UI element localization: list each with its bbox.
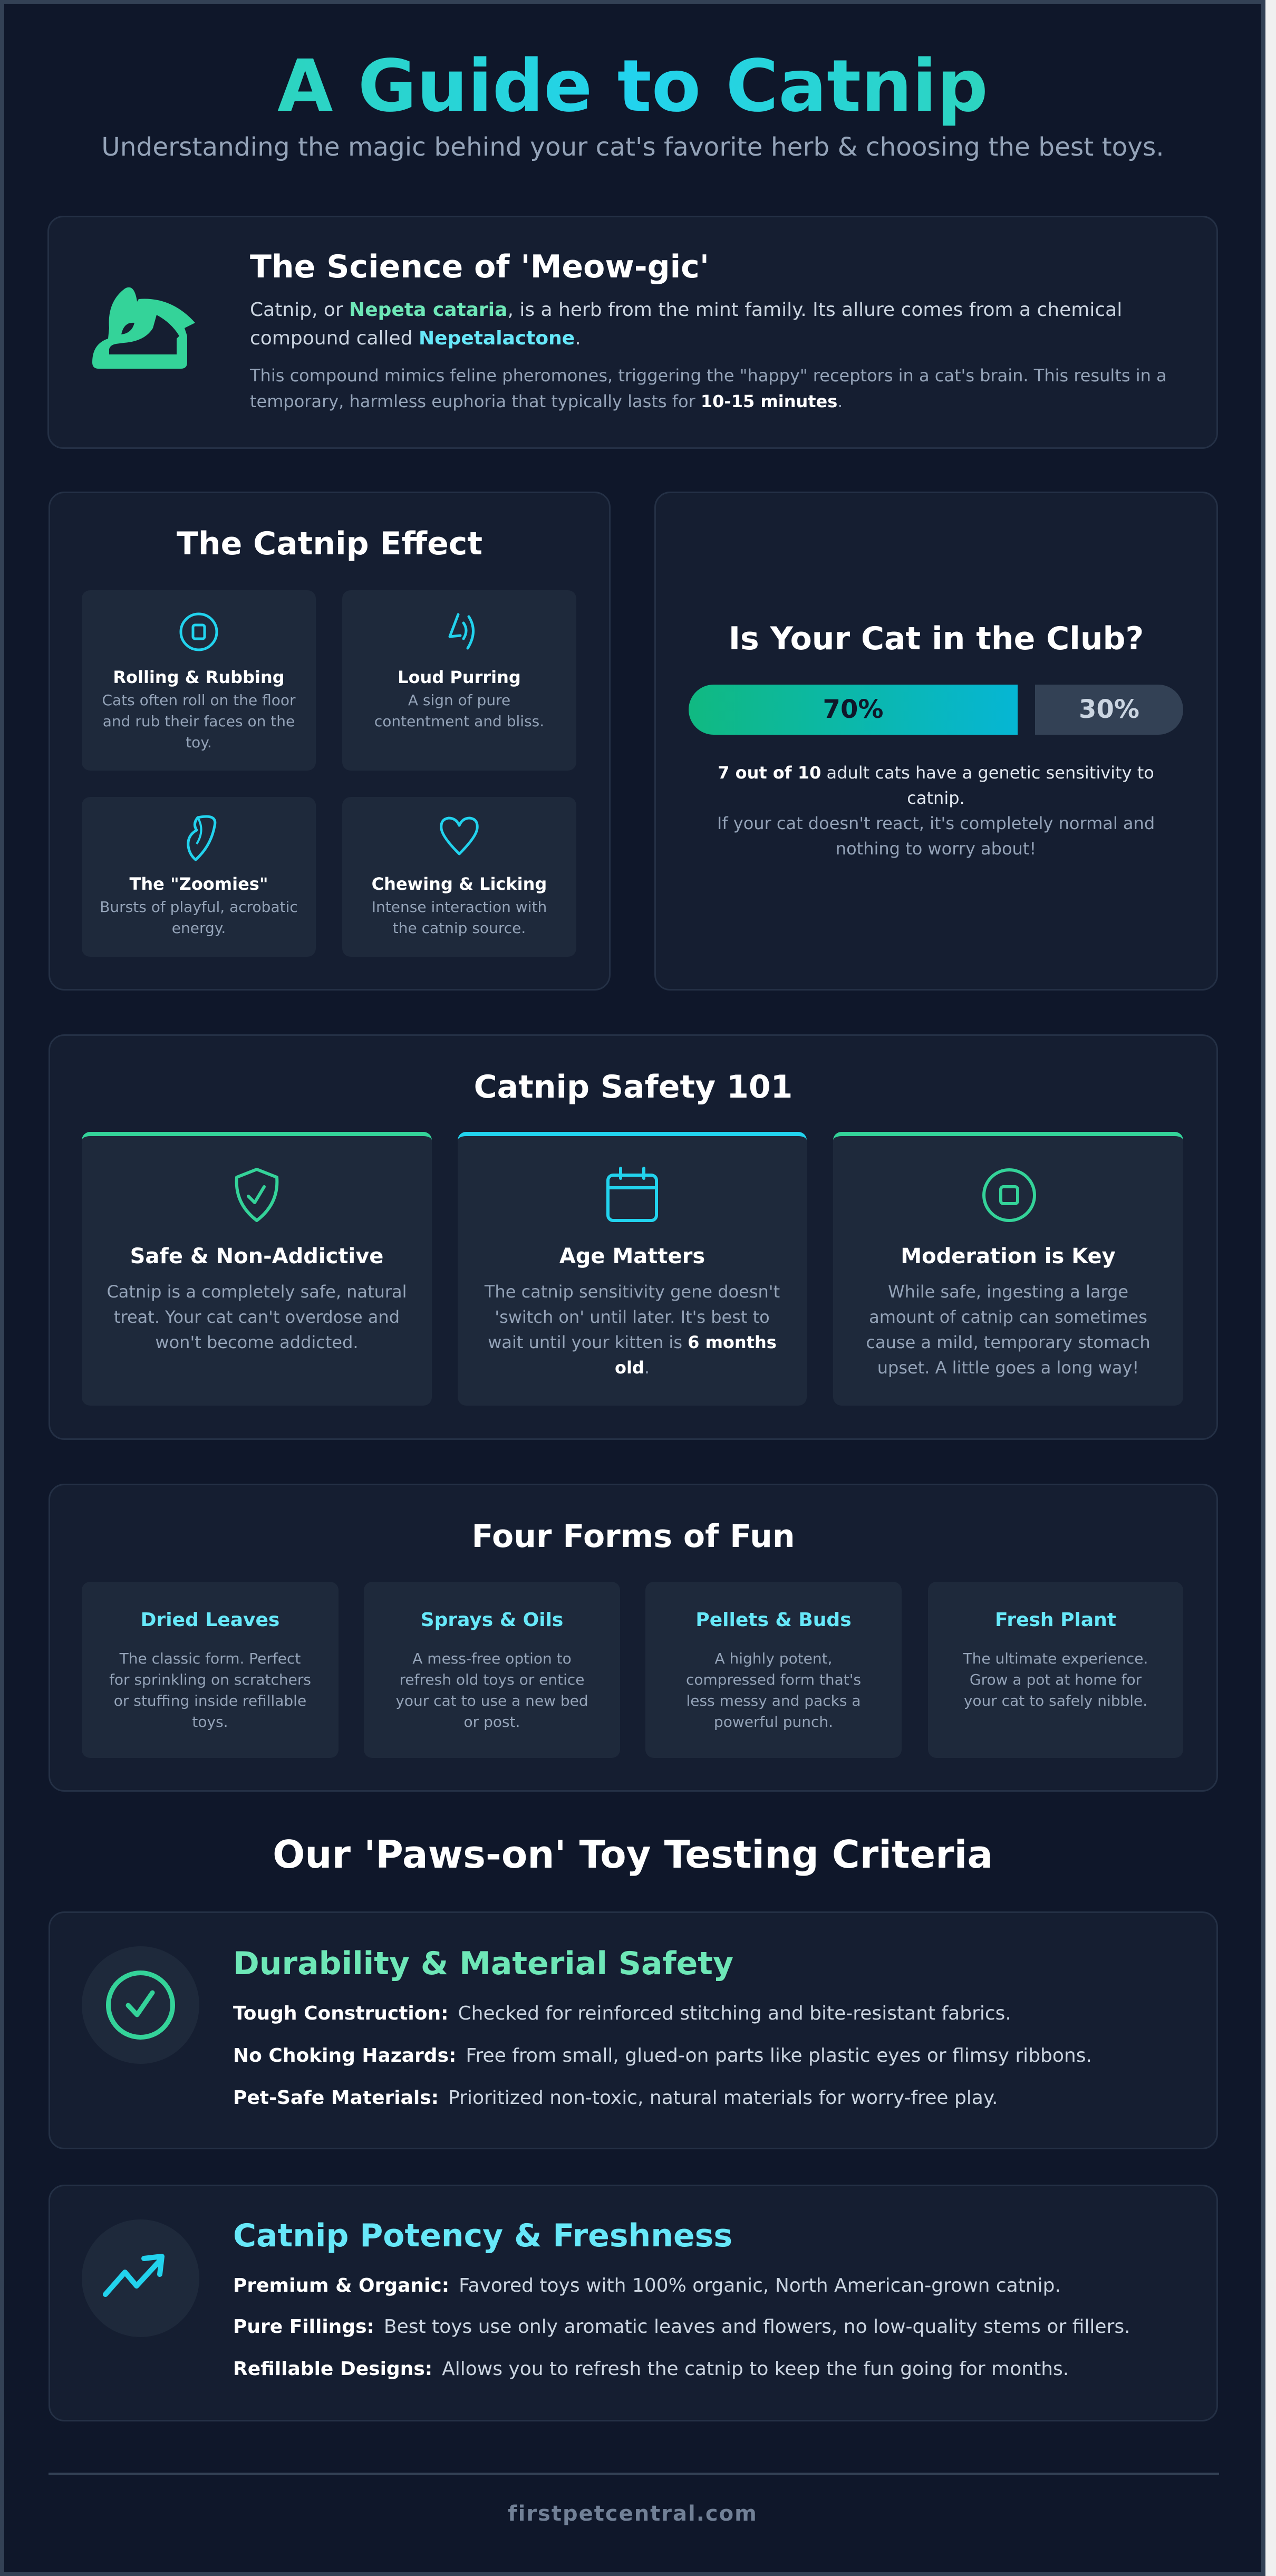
heading: testing criteria: Our 'Paws-on' Toy Testing Criteria [273, 1832, 993, 1877]
card: dried leaves: The classic form. Perfect for sprinkling on scratchers or stuffing inside refillable toys. [109, 1650, 311, 1731]
card: chewing: Intense interaction with the catnip source. [372, 898, 547, 937]
card: sprays [364, 1582, 620, 1758]
list: durability [233, 2003, 1092, 2109]
heading: safety: Catnip Safety 101 [474, 1069, 792, 1106]
text: science para 1: Catnip, or Nepeta cataria, is a herb from the mint family. Its allure comes from a chemical compound called Nepetalactone. [250, 299, 1122, 349]
card: rolling: Rolling & Rubbing [113, 667, 285, 687]
card: zoomies [82, 797, 316, 957]
card: safe: Safe & Non-Addictive [130, 1244, 383, 1268]
card: moderation: Moderation is Key [901, 1244, 1116, 1268]
card: sprays: Sprays & Oils [421, 1609, 563, 1631]
heading: forms: Four Forms of Fun [471, 1518, 795, 1555]
text: club stats [717, 763, 1155, 859]
card: pellets [645, 1582, 902, 1758]
card: chewing [342, 797, 576, 957]
heading: potency: Catnip Potency & Freshness [233, 2217, 732, 2254]
card: safe [82, 1132, 432, 1406]
bar chart: 70/30: 70% [823, 695, 883, 724]
card: age: Age Matters [559, 1244, 705, 1268]
card: dried leaves: Dried Leaves [141, 1609, 279, 1631]
card: moderation: While safe, ingesting a large amount of catnip can sometimes cause a mild, temporary stomach upset. A little goes a long way! [866, 1282, 1151, 1378]
card: dried leaves [82, 1582, 339, 1758]
card: zoomies: The "Zoomies" [129, 874, 268, 894]
icon: circle square [982, 1168, 1036, 1222]
list: potency [233, 2275, 1130, 2380]
panel: catnip effect [49, 492, 611, 991]
icon: rolling [179, 613, 218, 651]
text: Pet-Safe Materials: Prioritized non-toxic, natural materials for worry-free play. [233, 2087, 998, 2109]
card: age [458, 1132, 807, 1406]
icon: check circle [82, 1946, 199, 2064]
icon: cat [92, 287, 195, 369]
card: pellets: Pellets & Buds [695, 1609, 852, 1631]
text: Tough Construction: Checked for reinforced stitching and bite-resistant fabrics. [233, 2003, 1011, 2024]
card: fresh plant: Fresh Plant [995, 1609, 1116, 1631]
card: moderation [833, 1132, 1183, 1406]
bar chart: 70/30: 30% [1079, 695, 1139, 724]
title: A Guide to Catnip [277, 45, 988, 128]
text: Premium & Organic: Favored toys with 100% organic, North American-grown catnip. [233, 2275, 1061, 2296]
card: pellets: A highly potent, compressed form that's less messy and packs a powerful punch. [686, 1650, 861, 1731]
card: fresh plant: The ultimate experience. Grow a pot at home for your cat to safely nibble. [963, 1650, 1148, 1709]
text: Pure Fillings: Best toys use only aromatic leaves and flowers, no low-quality stems or fillers. [233, 2316, 1130, 2338]
heading: catnip effect: The Catnip Effect [177, 525, 482, 562]
card: age: The catnip sensitivity gene doesn't 'switch on' until later. It's best to wait until your kitten is 6 months old. [485, 1282, 780, 1378]
subtitle: Understanding the magic behind your cat's favorite herb & choosing the best toys. [101, 132, 1164, 162]
icon: heart [440, 816, 479, 856]
card: rolling [82, 590, 316, 771]
card: chewing: Chewing & Licking [372, 874, 547, 894]
icon: purring [448, 613, 475, 650]
text: No Choking Hazards: Free from small, glued-on parts like plastic eyes or flimsy ribbons. [233, 2045, 1092, 2066]
icon: shield [235, 1168, 278, 1223]
panel: club [654, 492, 1218, 991]
card: purring: Loud Purring [398, 667, 521, 687]
bar chart: 70/30 [689, 685, 1183, 735]
text: Refillable Designs: Allows you to refresh the catnip to keep the fun going for months. [233, 2358, 1069, 2380]
card: fresh plant [928, 1582, 1183, 1758]
heading: club: Is Your Cat in the Club? [729, 620, 1144, 657]
heading: science: The Science of 'Meow-gic' [250, 248, 709, 285]
panel: science [47, 216, 1218, 449]
panel: durability [49, 1911, 1218, 2149]
card: zoomies: Bursts of playful, acrobatic energy. [100, 898, 298, 937]
card: sprays: A mess-free option to refresh old toys or entice your cat to use a new bed or post. [395, 1650, 588, 1731]
heading: durability: Durability & Material Safety [233, 1945, 733, 1982]
card: rolling: Cats often roll on the floor and rub their faces on the toy. [102, 691, 296, 751]
text: club stats: 7 out of 10 adult cats have a genetic sensitivity to catnip. [718, 763, 1154, 808]
footer: firstpetcentral.com [508, 2502, 758, 2526]
icon: zoomies [187, 815, 216, 861]
card: purring [342, 590, 576, 771]
icon: trending arrow [82, 2219, 199, 2337]
card: purring: A sign of pure contentment and bliss. [374, 691, 544, 730]
panel: safety [49, 1034, 1218, 1440]
text: club stats: If your cat doesn't react, it's completely normal and nothing to worry about! [717, 813, 1155, 859]
panel: potency [49, 2185, 1218, 2421]
panel: forms [49, 1484, 1218, 1792]
icon: calendar [606, 1167, 658, 1222]
text: science para 2: This compound mimics feline pheromones, triggering the "happy" receptors in a cat's brain. This results in a temporary, harmless euphoria that typically lasts for 10-15 minutes. [250, 366, 1167, 411]
card: safe: Catnip is a completely safe, natural treat. Your cat can't overdose and won't become addicted. [107, 1282, 407, 1352]
